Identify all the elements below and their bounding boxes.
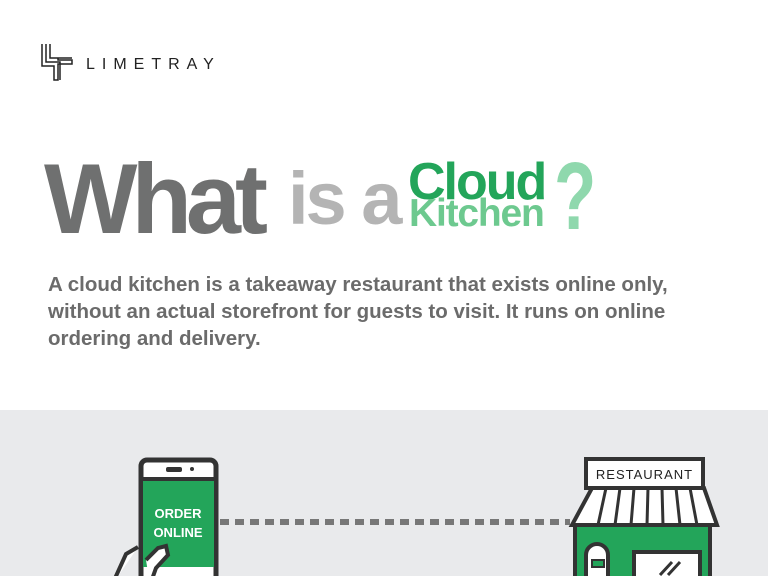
arrow: dashed connector [220, 519, 570, 525]
description text: ordering and delivery. [48, 327, 261, 350]
title: What [44, 143, 262, 254]
title: Cloud [408, 153, 545, 211]
title [44, 143, 596, 254]
icon: phone with hand: ORDER [155, 506, 202, 521]
icon: limetray mark [41, 44, 73, 81]
icon: restaurant: RESTAURANT [596, 467, 693, 482]
icon: phone with hand [112, 460, 216, 581]
icon: restaurant [572, 459, 717, 581]
brand name: LIMETRAY [86, 56, 221, 73]
description text: A cloud kitchen is a takeaway restaurant that exists online only, [48, 273, 668, 296]
description text: without an actual storefront for guests to visit. It runs on online [48, 300, 665, 323]
description text [48, 273, 668, 350]
title: ? [554, 143, 596, 250]
icon: phone with hand: ONLINE [153, 525, 203, 540]
title: Kitchen [409, 192, 544, 235]
title: is a [288, 157, 399, 240]
panel: illustration [0, 410, 768, 576]
logo [41, 44, 221, 81]
